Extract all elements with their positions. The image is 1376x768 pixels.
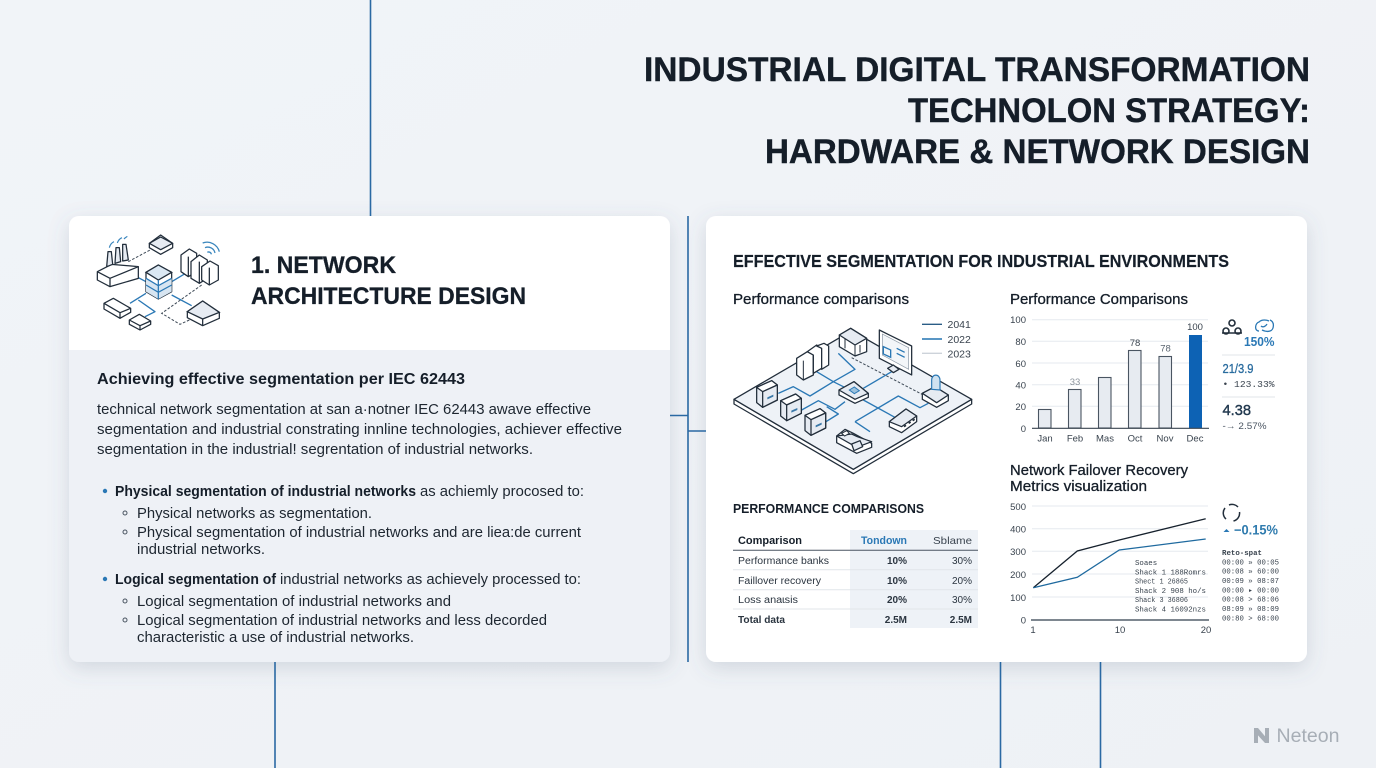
line chart: 500 — [1010, 502, 1026, 513]
recovery time list: 00:80 > 68:00 — [1222, 615, 1279, 623]
comparison table: Tondown — [861, 535, 907, 547]
bullet list: physical segmentation: Physical networks as segmentation. — [137, 506, 372, 522]
icon: refresh cloud — [1256, 320, 1273, 331]
comparison table: Loss anaɩsis — [738, 595, 798, 606]
heading: network architecture design: ARCHITECTURE DESIGN — [251, 283, 526, 310]
bullet list: physical segmentation: Physical segmentation of industrial networks — [115, 484, 416, 500]
line chart: 300 — [1010, 547, 1026, 558]
bar chart: Jan — [1037, 434, 1053, 444]
line chart — [1010, 502, 1211, 636]
line chart: 0 — [1021, 616, 1026, 626]
connector lines — [275, 0, 1100, 768]
bar chart: Dec — [1187, 434, 1204, 444]
bar chart: 78 — [1130, 338, 1140, 349]
recovery time list: 00:00 » 00:05 — [1222, 559, 1279, 567]
bar chart — [1010, 315, 1209, 444]
bullet list: logical segmentation: characteristic a use of industrial networks. — [137, 630, 414, 646]
bullet list: physical segmentation — [103, 484, 584, 558]
stat: 150%: 150% — [1244, 335, 1274, 349]
subheading: network failover: Metrics visualization — [1010, 479, 1147, 495]
heading: network architecture design — [251, 252, 526, 310]
chart legend text: Soaes — [1135, 560, 1157, 568]
comparison table — [733, 501, 978, 628]
chart legend text: Shack 2 908 ho/s — [1135, 588, 1206, 596]
bar chart: 100 — [1010, 315, 1026, 326]
comparison table: Faillover recovery — [738, 576, 821, 587]
legend: years — [922, 319, 971, 360]
bullet list: physical segmentation: Physical segmentation of industrial networks and are liea:de current — [137, 525, 581, 541]
bullet list: physical segmentation: as achiemly procosed to: — [420, 484, 584, 500]
title — [644, 51, 1310, 171]
comparison table: 10% — [887, 576, 907, 587]
comparison table: Sblame — [933, 535, 972, 547]
subheading: network failover: Network Failover Recovery — [1010, 463, 1189, 479]
intro paragraph — [97, 402, 622, 458]
stat: 4.38 — [1222, 397, 1275, 432]
bar chart: 20 — [1015, 402, 1026, 413]
recovery time list: 00:09 » 08:07 — [1222, 578, 1279, 586]
intro paragraph: segmentation and industrial constrating innline technologies, achiever effective — [97, 422, 622, 438]
recovery time list: 08:09 » 08:09 — [1222, 606, 1279, 614]
recovery time list: 00:00 ▸ 00:00 — [1222, 587, 1279, 595]
comparison table: 30% — [952, 556, 972, 567]
bar chart: 80 — [1015, 337, 1026, 348]
recovery time list: 00:08 > 68:06 — [1222, 597, 1279, 605]
subheading: performance comparisons right: Performance Comparisons — [1010, 292, 1188, 308]
chart legend text: Shack 1 188Romrs — [1135, 569, 1206, 577]
comparison table: 10% — [887, 556, 907, 567]
icon: failover cycle — [1223, 504, 1240, 521]
line chart: 20 — [1201, 625, 1211, 636]
stat: 4.38: -→ 2.57% — [1222, 421, 1267, 432]
comparison table: 2.5M — [950, 615, 972, 626]
line chart: 1 — [1030, 625, 1036, 636]
comparison table: 20% — [952, 576, 972, 587]
bar chart: 40 — [1015, 380, 1026, 392]
stat: 21/3.9: 21/3.9 — [1222, 362, 1254, 376]
line chart: 400 — [1010, 524, 1026, 536]
comparison table: 30% — [952, 595, 972, 606]
title: HARDWARE & NETWORK DESIGN — [765, 133, 1310, 171]
bar chart: 0 — [1021, 424, 1026, 435]
intro paragraph: segmentation in the industrial! segrentation of industrial networks. — [97, 442, 533, 458]
bullet list: logical segmentation — [103, 572, 581, 646]
stat: 21/3.9: • 123.33% — [1222, 379, 1275, 390]
intro paragraph: technical network segmentation at san a·notner IEC 62443 awave effective — [97, 402, 591, 418]
bullet list: logical segmentation: industrial networks as achievely processed to: — [280, 572, 581, 588]
line chart: 100 — [1010, 593, 1026, 604]
illustration: isometric network floor — [734, 328, 972, 474]
bar chart: 60 — [1015, 359, 1026, 370]
bar chart: Feb — [1067, 434, 1083, 444]
chart legend text: Shack 4 16092nzs — [1135, 606, 1206, 614]
line chart: 10 — [1115, 625, 1125, 636]
bar chart: Nov — [1157, 434, 1174, 444]
subheading: Achieving effective segmentation per IEC 62443 — [97, 371, 465, 388]
panel heading: EFFECTIVE SEGMENTATION FOR INDUSTRIAL ENVIRONMENTS — [733, 251, 1229, 271]
bar chart: Mas — [1096, 434, 1114, 444]
chart legend text: Shect 1 26865 — [1135, 579, 1188, 587]
bar chart: 33 — [1070, 377, 1080, 388]
line chart: 200 — [1010, 570, 1026, 581]
subheading: performance comparisons left: Performance comparisons — [733, 292, 909, 308]
chart legend text: Shack 3 36806 — [1135, 597, 1188, 605]
bullet list: logical segmentation: Logical segmentation of — [115, 572, 276, 588]
stat: 4.38: 4.38 — [1222, 403, 1251, 419]
bullet list: physical segmentation: industrial networks. — [137, 542, 265, 558]
comparison table: PERFORMANCE COMPARISONS — [733, 501, 924, 516]
title: INDUSTRIAL DIGITAL TRANSFORMATION — [644, 51, 1310, 89]
bar chart: 78 — [1160, 344, 1171, 354]
recovery time list: 00:08 » 60:00 — [1222, 569, 1279, 577]
recovery time list — [1222, 550, 1279, 623]
subheading: network failover — [1010, 463, 1189, 495]
watermark: Neteon: Neteon — [1276, 726, 1340, 747]
icon: cogs — [1222, 320, 1242, 334]
chart legend text — [1135, 560, 1206, 614]
comparison table: 2.5M — [885, 615, 907, 626]
comparison table: 20% — [887, 595, 907, 606]
legend: years: 2041 — [948, 319, 971, 331]
stat: 21/3.9 — [1222, 355, 1275, 390]
legend: years: 2023 — [948, 348, 971, 360]
bullet list: logical segmentation: Logical segmentation of industrial networks and — [137, 594, 451, 610]
legend: years: 2022 — [948, 334, 971, 346]
heading: network architecture design: 1. NETWORK — [251, 252, 397, 279]
panel: network architecture design — [69, 216, 670, 662]
comparison table: Total data — [738, 615, 785, 626]
comparison table: Performance banks — [738, 556, 829, 567]
bar chart: 100 — [1187, 322, 1203, 333]
bar chart: Oct — [1128, 434, 1143, 444]
stat: -0.15%: −0.15% — [1234, 523, 1278, 538]
title: TECHNOLON STRATEGY: — [908, 92, 1310, 130]
icon: network architecture — [97, 235, 219, 330]
comparison table: Comparison — [738, 535, 802, 547]
panel: effective segmentation — [706, 216, 1307, 662]
recovery time list: Reto-spat — [1222, 550, 1262, 558]
bullet list: logical segmentation: Logical segmentation of industrial networks and less decorded — [137, 613, 547, 629]
